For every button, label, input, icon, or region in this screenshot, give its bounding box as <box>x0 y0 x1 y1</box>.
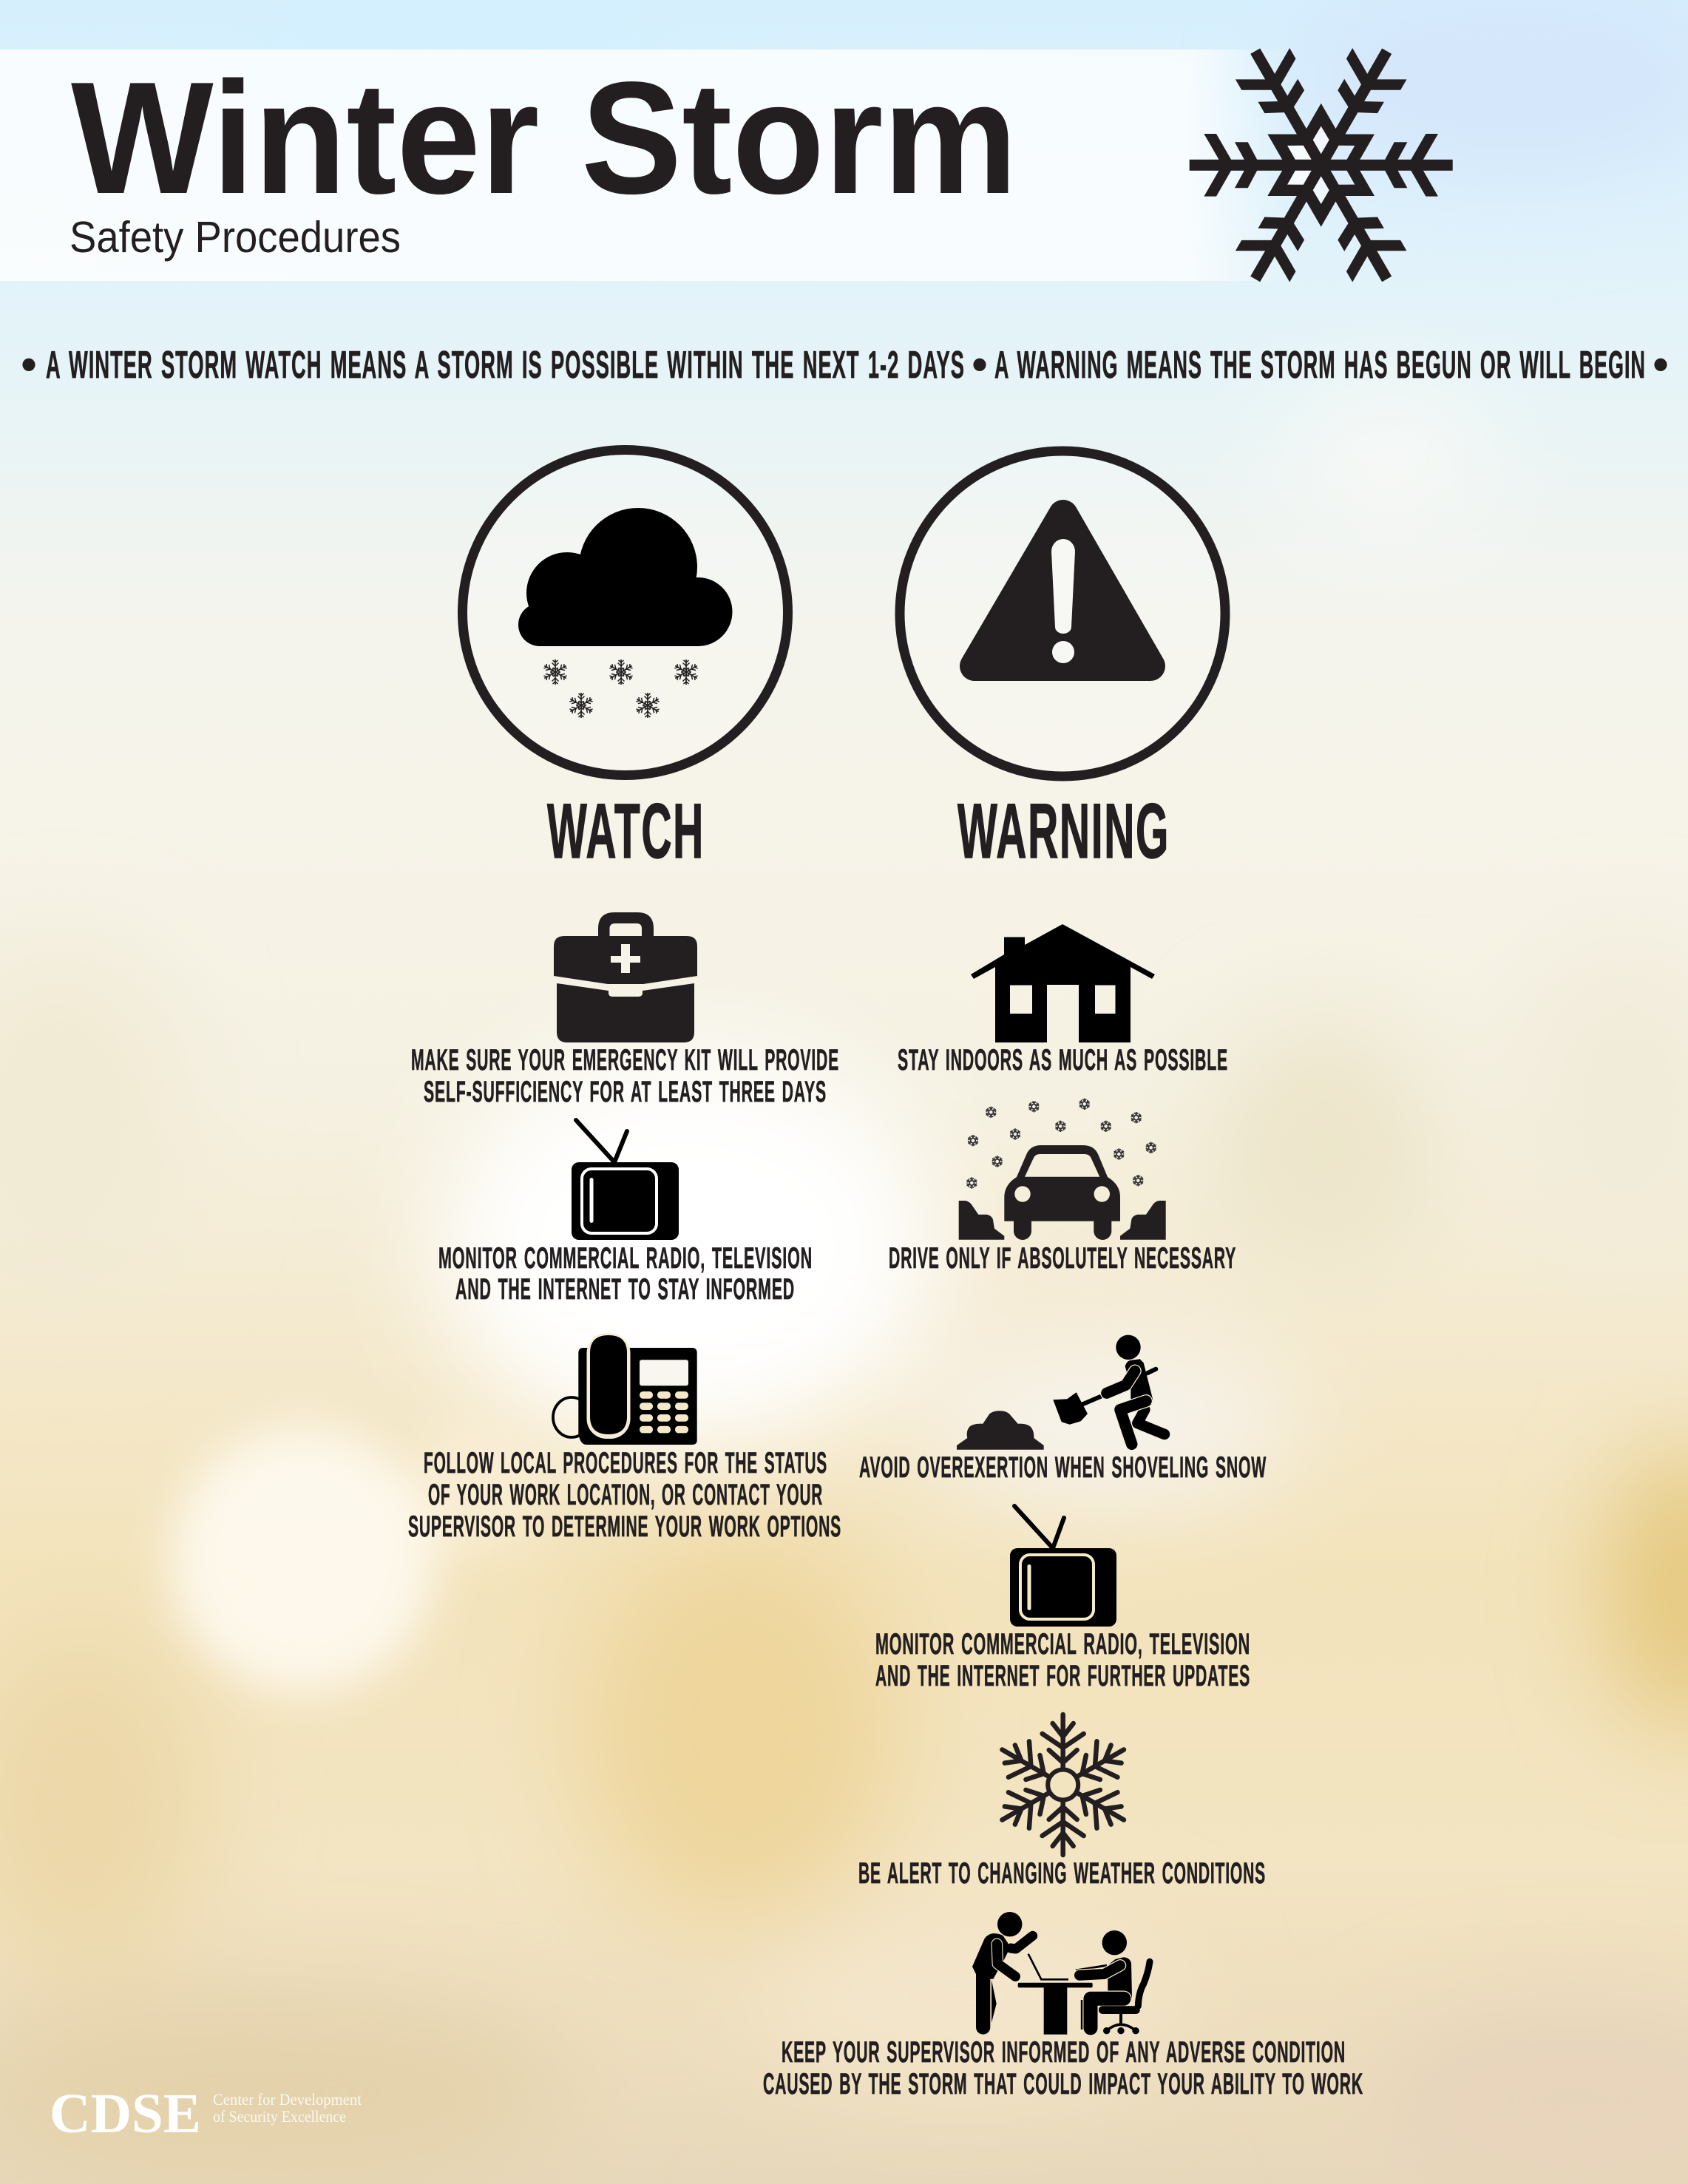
logo: CDSE: Center for Development <box>213 2090 362 2109</box>
text: emergency kit: SELF-SUFFICIENCY FOR AT LEAST THREE DAYS <box>424 1076 827 1108</box>
icon: emergency kit <box>554 912 697 1042</box>
icon: car in snow <box>959 1099 1166 1240</box>
text: emergency kit: MAKE SURE YOUR EMERGENCY KIT WILL PROVIDE <box>411 1044 839 1076</box>
logo: CDSE: CDSE <box>50 2083 201 2145</box>
icon: person shoveling snow <box>957 1335 1165 1450</box>
heading: watch: WATCH <box>547 788 705 875</box>
text: local procedures: FOLLOW LOCAL PROCEDURES FOR THE STATUS <box>424 1447 827 1479</box>
text: weather: BE ALERT TO CHANGING WEATHER CONDITIONS <box>858 1857 1266 1890</box>
text: monitor: AND THE INTERNET TO STAY INFORMED <box>455 1273 795 1306</box>
text: shoveling: AVOID OVEREXERTION WHEN SHOVELING SNOW <box>859 1451 1267 1484</box>
icon: large snowflake <box>1190 35 1453 295</box>
icon: two people at desk <box>972 1912 1150 2035</box>
title: Winter Storm <box>71 48 1017 227</box>
text: monitor updates <box>875 1628 1250 1692</box>
icon: television <box>572 1120 679 1240</box>
panel: watch column <box>408 450 841 1543</box>
text: emergency kit <box>411 1044 839 1108</box>
text: stay indoors: STAY INDOORS AS MUCH AS POSSIBLE <box>898 1044 1228 1076</box>
header banner <box>0 50 1290 281</box>
text: monitor <box>438 1242 813 1306</box>
intro statement: • <box>21 339 37 389</box>
logo: CDSE <box>50 2083 362 2145</box>
icon: snowflake <box>992 1715 1134 1855</box>
panel: warning column <box>763 451 1363 2100</box>
text: monitor updates: MONITOR COMMERCIAL RADIO, TELEVISION <box>875 1628 1250 1661</box>
logo: CDSE: of Security Excellence <box>213 2107 346 2126</box>
text: drive: DRIVE ONLY IF ABSOLUTELY NECESSARY <box>889 1242 1236 1275</box>
icon: watch circle with snow cloud <box>463 450 788 775</box>
heading: warning: WARNING <box>957 788 1170 875</box>
text: local procedures <box>408 1447 841 1543</box>
intro statement: • <box>972 339 988 389</box>
text: monitor: MONITOR COMMERCIAL RADIO, TELEVISION <box>438 1242 813 1275</box>
intro statement: • <box>1653 339 1669 389</box>
icon: house <box>971 924 1155 1042</box>
subtitle: Safety Procedures <box>70 213 401 262</box>
icon: desk phone <box>553 1333 697 1445</box>
text: local procedures: SUPERVISOR TO DETERMINE YOUR WORK OPTIONS <box>408 1510 841 1543</box>
text: local procedures: OF YOUR WORK LOCATION, OR CONTACT YOUR <box>428 1479 823 1511</box>
icon: warning circle with triangle <box>900 451 1225 776</box>
text: monitor updates: AND THE INTERNET FOR FURTHER UPDATES <box>875 1660 1250 1692</box>
icon: television <box>1010 1506 1116 1627</box>
text: supervisor <box>763 2036 1363 2100</box>
